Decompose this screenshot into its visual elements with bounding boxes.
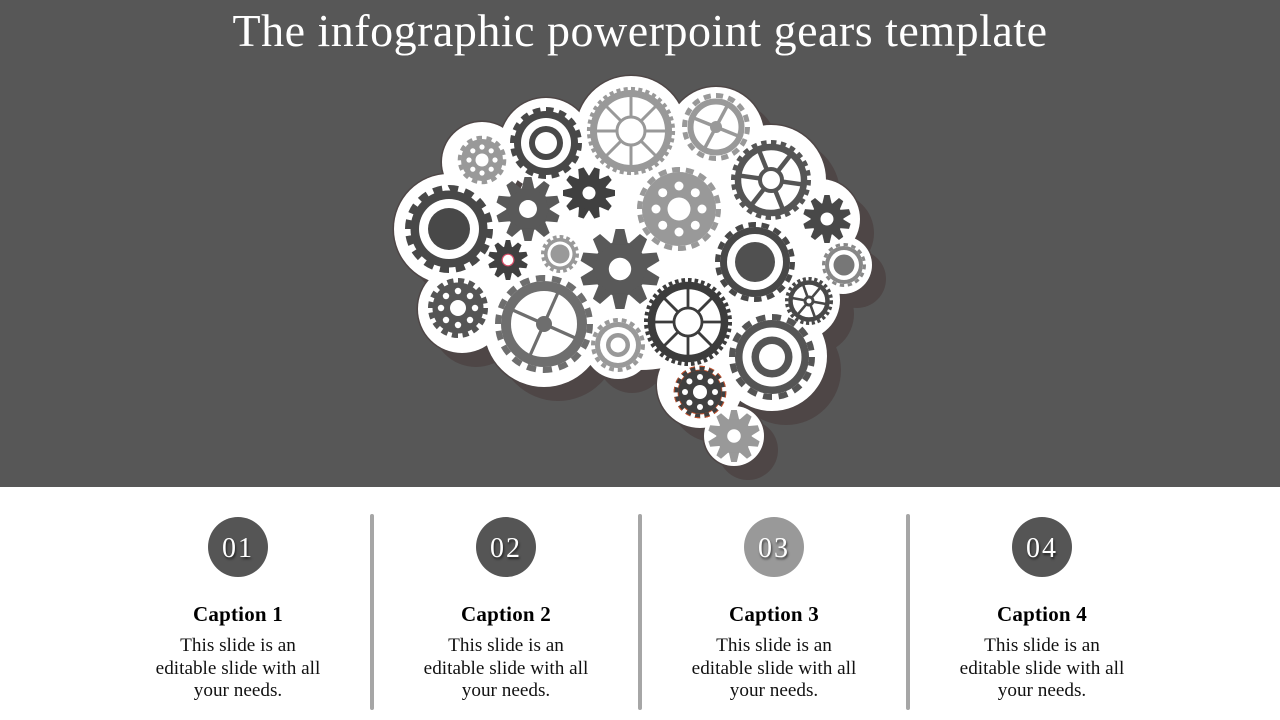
caption heading 4: Caption 4 (997, 602, 1087, 626)
number badge 01 (208, 517, 268, 577)
number badge 02 (476, 517, 536, 577)
gear: large mid-grey four spoke (498, 278, 590, 370)
gear: light ringed lower (593, 320, 643, 370)
caption heading 2: Caption 2 (461, 602, 551, 626)
gear: central plain (579, 229, 661, 309)
title: The infographic powerpoint gears template (232, 5, 1048, 56)
gear: black fine toothed (646, 280, 730, 364)
brain silhouette shadow (408, 90, 886, 480)
divider 1 (370, 514, 374, 710)
divider 3 (906, 514, 910, 710)
number badge 01: 01 (222, 533, 254, 564)
gear: small dark right (803, 195, 851, 243)
gear: small fine toothed right (787, 279, 831, 323)
divider 2 (638, 514, 642, 710)
number badge 03: 03 (758, 533, 790, 564)
gear: small pink hub (488, 240, 528, 280)
caption text 3: your needs. (730, 680, 818, 701)
caption text 2: editable slide with all (424, 658, 588, 679)
gear: dark holes lower left (430, 280, 486, 336)
number badge 02: 02 (490, 533, 522, 564)
gear: small ringed right (824, 244, 864, 286)
caption text 3: This slide is an (716, 635, 832, 656)
gear: large dark ringed lower right (732, 317, 812, 397)
gear: dark ring centre right (718, 224, 792, 300)
gear: light four spoke (684, 96, 748, 158)
gear: tiny light ringed (543, 237, 577, 271)
brain of gears illustration (392, 74, 886, 480)
column: caption 2 (424, 517, 588, 701)
gear: dark six spoke (733, 142, 809, 218)
gears (408, 89, 864, 462)
gear: large dark left (408, 188, 490, 270)
gear: orange outlined (674, 366, 726, 418)
column: caption 3 (692, 517, 856, 701)
caption text 4: This slide is an (984, 635, 1100, 656)
caption text 3 (692, 635, 856, 701)
column: caption 1 (156, 517, 320, 701)
number badge 04 (1012, 517, 1072, 577)
caption text 4 (960, 635, 1124, 701)
caption heading 1: Caption 1 (193, 602, 283, 626)
caption heading 3: Caption 3 (729, 602, 819, 626)
caption text 2 (424, 635, 588, 701)
caption text 4: your needs. (998, 680, 1086, 701)
brain silhouette outline (394, 76, 872, 466)
caption text 1: your needs. (194, 680, 282, 701)
gear: dark ringed top (512, 110, 580, 176)
number badge 04: 04 (1026, 533, 1058, 564)
gear: small near black (556, 160, 622, 226)
caption text 2: This slide is an (448, 635, 564, 656)
column: caption 4 (960, 517, 1124, 701)
caption text 1 (156, 635, 320, 701)
header band (0, 0, 1280, 487)
number badge 03 (744, 517, 804, 577)
gear: medium plain (496, 177, 560, 241)
caption text 2: your needs. (462, 680, 550, 701)
gear: small light holes (460, 138, 504, 182)
caption text 1: editable slide with all (156, 658, 320, 679)
gear: light bottom stem (708, 410, 760, 462)
brain silhouette (394, 76, 872, 466)
caption text 3: editable slide with all (692, 658, 856, 679)
caption text 1: This slide is an (180, 635, 296, 656)
gear: large light holes (640, 170, 718, 248)
gear: large light spoked (589, 89, 673, 173)
caption text 4: editable slide with all (960, 658, 1124, 679)
